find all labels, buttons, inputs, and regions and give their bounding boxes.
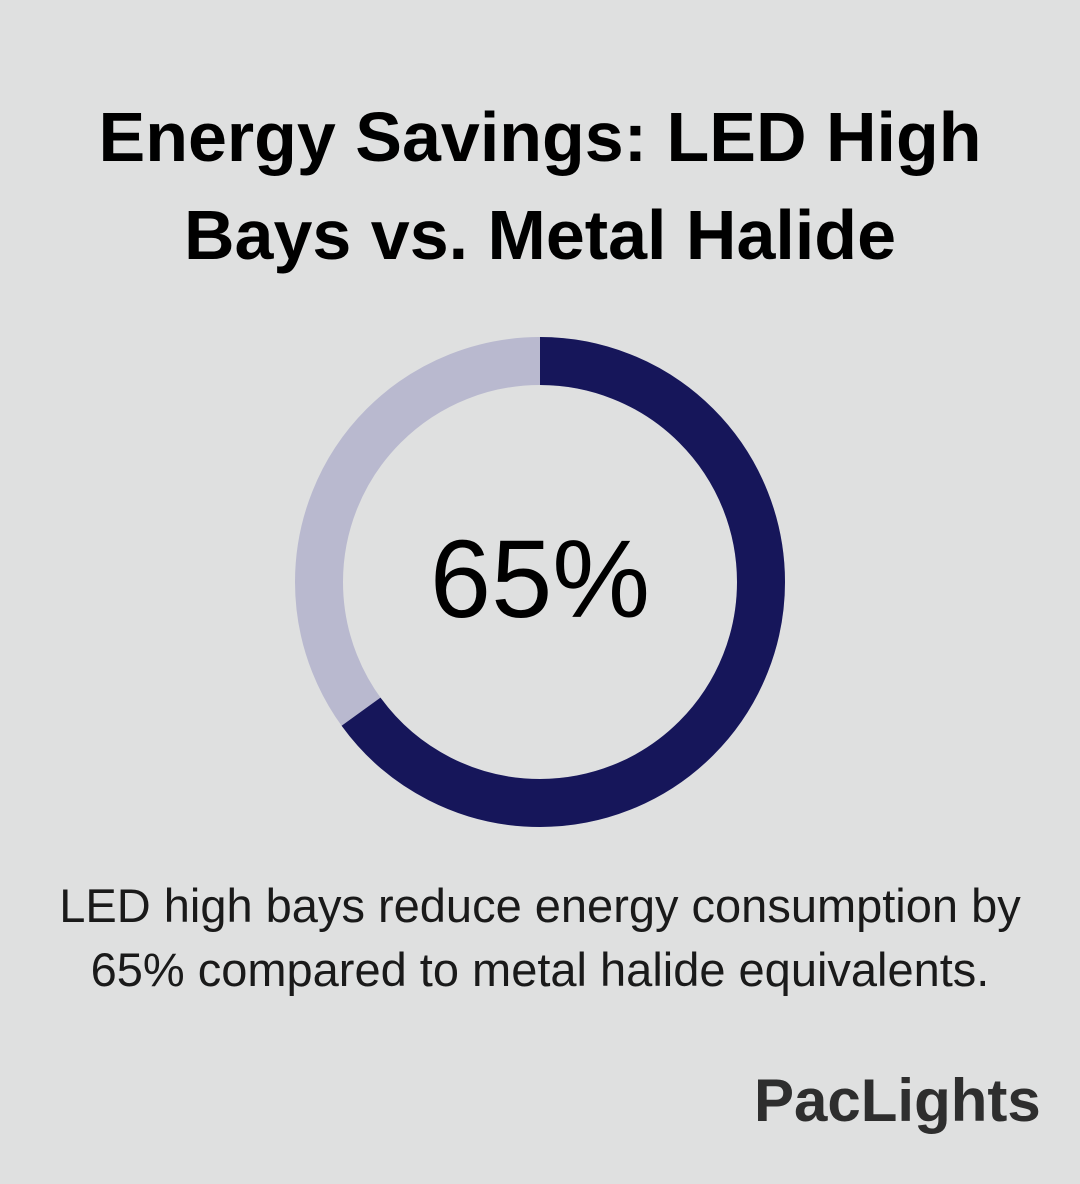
description: 65% compared to metal halide equivalents. (91, 943, 989, 996)
donut chart: 65% (430, 518, 650, 641)
title: Energy Savings: LED High (99, 98, 981, 176)
title: Bays vs. Metal Halide (184, 196, 896, 274)
title (99, 98, 981, 274)
logo: PacLights (754, 1067, 1041, 1134)
description: LED high bays reduce energy consumption by (59, 879, 1021, 932)
description (59, 879, 1021, 996)
